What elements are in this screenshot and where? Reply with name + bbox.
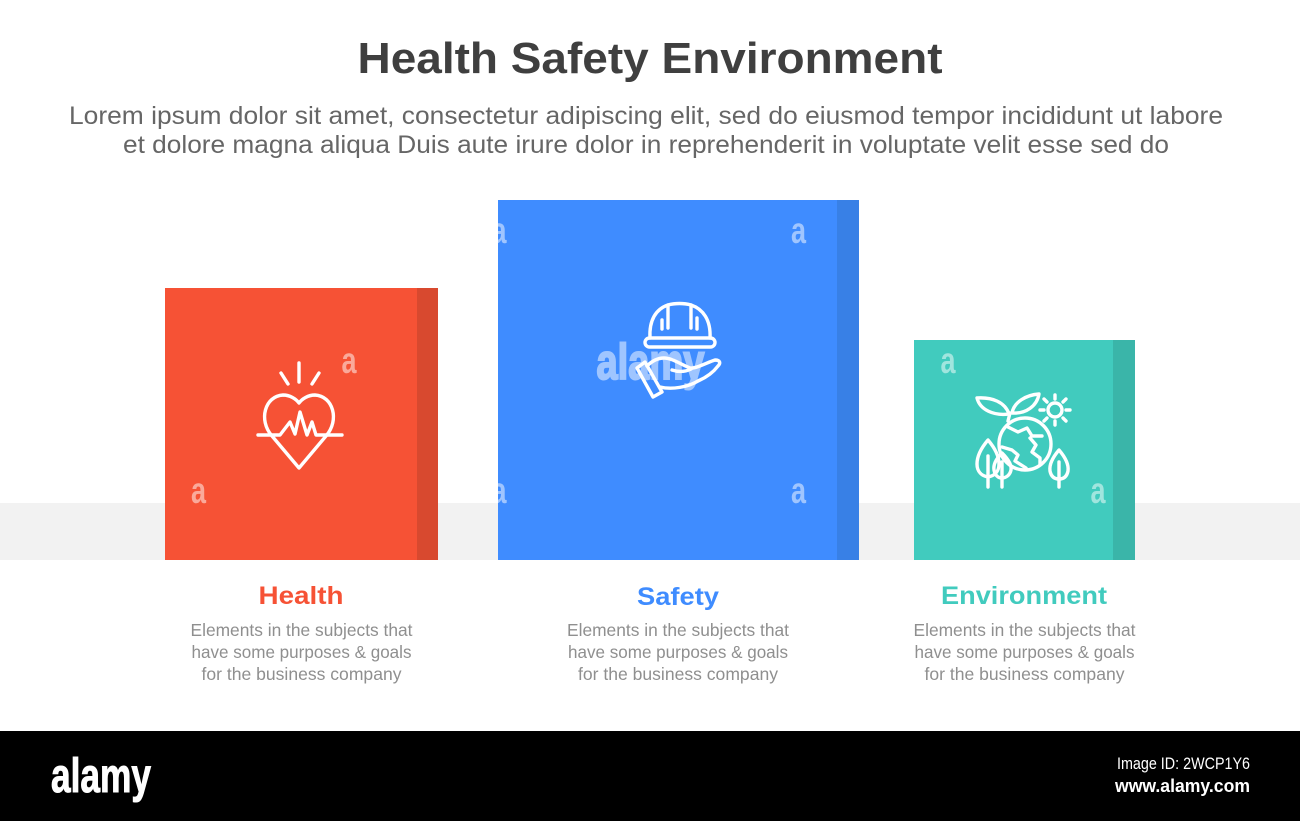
health description: for the business company [202, 664, 402, 684]
title: Health Safety Environment [358, 34, 943, 83]
environment description: have some purposes & goals [914, 642, 1135, 662]
safety label: Safety [637, 583, 719, 611]
environment description: for the business company [924, 664, 1125, 684]
environment bar side [1113, 340, 1135, 560]
intro paragraph: et dolore magna aliqua Duis aute irure dolor in reprehenderit in voluptate velit esse sed do [123, 131, 1169, 159]
safety description: have some purposes & goals [568, 642, 788, 662]
environment watermark letters: a [1090, 470, 1106, 511]
safety watermark [492, 210, 806, 511]
safety watermark: alamy [596, 334, 705, 390]
environment label: Environment [941, 582, 1108, 610]
icon: hard hat over hand [637, 304, 720, 397]
safety watermark: a [492, 470, 507, 511]
health bar face [165, 288, 438, 560]
intro paragraph: Lorem ipsum dolor sit amet, consectetur adipiscing elit, sed do eiusmod tempor incididunt ut labore [69, 102, 1223, 130]
health watermark letters [191, 340, 357, 511]
image id: Image ID: 2WCP1Y6 [1117, 755, 1250, 773]
safety description: for the business company [578, 664, 778, 684]
safety bar side [837, 200, 859, 560]
environment description [914, 620, 1136, 684]
environment watermark letters: a [940, 340, 956, 381]
icon: globe with leaves, trees and sun [977, 394, 1070, 487]
health watermark letters: a [191, 470, 206, 511]
health description: Elements in the subjects that [190, 620, 413, 640]
panel: health [165, 288, 438, 684]
safety description [567, 620, 789, 684]
floor band [0, 503, 1300, 560]
health description [190, 620, 413, 684]
icon: heart with pulse [258, 363, 342, 468]
health bar side [417, 288, 438, 560]
footer url: www.alamy.com [1114, 776, 1250, 796]
footer logo: alamy [51, 750, 151, 803]
environment watermark letters [940, 340, 1106, 511]
footer bar [0, 731, 1300, 821]
panel: environment [914, 340, 1136, 684]
safety watermark: a [492, 210, 507, 251]
safety description: Elements in the subjects that [567, 620, 789, 640]
intro paragraph [69, 102, 1223, 159]
health watermark letters: a [342, 340, 357, 381]
health label: Health [258, 582, 344, 610]
environment bar face [914, 340, 1135, 560]
safety bar face [498, 200, 859, 560]
safety watermark: a [791, 210, 806, 251]
health description: have some purposes & goals [192, 642, 412, 662]
safety watermark: a [791, 470, 806, 511]
panel: safety [492, 200, 859, 684]
environment description: Elements in the subjects that [914, 620, 1136, 640]
